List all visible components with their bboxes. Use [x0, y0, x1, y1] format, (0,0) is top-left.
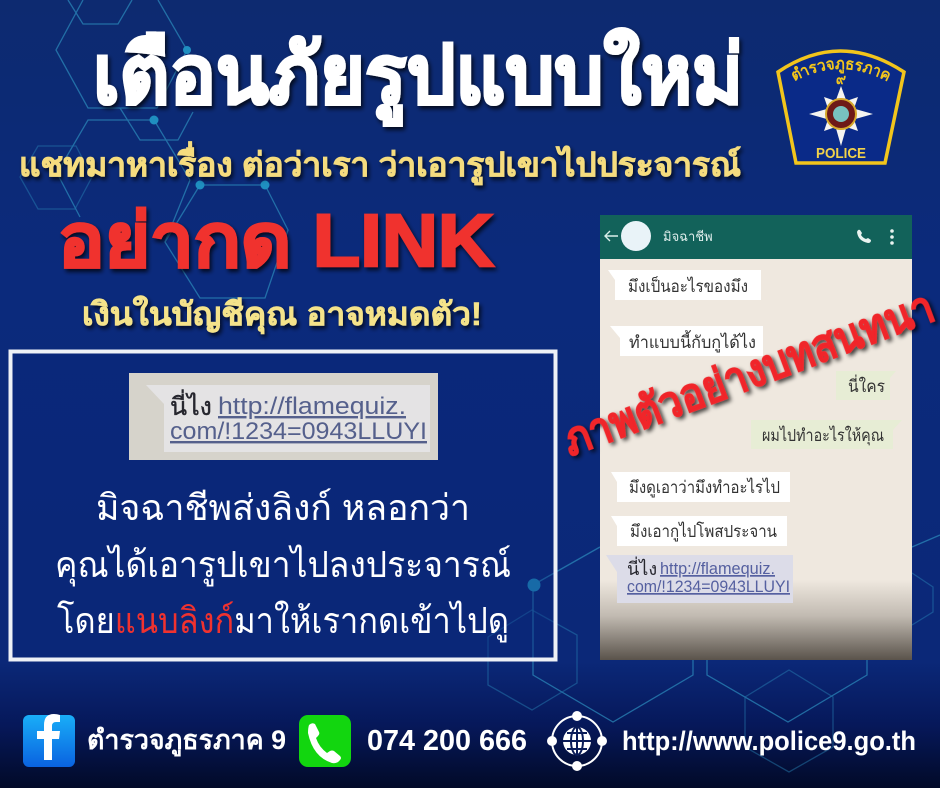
facebook page name: ตำรวจภูธรภาค 9	[87, 725, 286, 757]
chat bubbles: มึงดูเอาว่ามึงทำอะไรไป	[629, 477, 780, 498]
subtitle: แชทมาหาเรื่อง ต่อว่าเรา ว่าเอารูปเขาไปประจารณ์	[19, 141, 741, 186]
chat bubbles	[606, 270, 902, 603]
chat header: มิจฉาชีพ	[663, 229, 713, 244]
explanation text: โดยแนบลิงก์มาให้เรากดเข้าไปดู	[57, 600, 509, 643]
warning heading: อย่ากด LINK	[58, 199, 494, 282]
SMS screenshot: นี่ไง	[170, 389, 212, 421]
website: http://www.police9.go.th	[622, 726, 916, 756]
explanation text: มิจฉาชีพส่งลิงก์ หลอกว่า	[96, 487, 470, 528]
panel: explanation	[10, 352, 556, 660]
chat bubbles: นี่ไง	[627, 556, 657, 579]
police badge	[776, 49, 906, 165]
police badge: ๙	[836, 71, 846, 87]
icon: globe	[547, 711, 607, 771]
icon: facebook	[23, 714, 75, 767]
SMS screenshot	[129, 373, 438, 460]
SMS screenshot: http://flamequiz.	[218, 393, 406, 420]
chat bubbles: http://flamequiz.	[660, 559, 775, 578]
chat screenshot	[600, 215, 912, 660]
footer contacts	[23, 711, 916, 771]
SMS screenshot: com/!1234=0943LLUYI	[170, 418, 427, 445]
icon: phone	[299, 715, 351, 767]
police badge: ตำรวจภูธรภาค	[792, 60, 890, 82]
chat bubbles: ทำแบบนี้กับกูได้ไง	[629, 330, 756, 353]
explanation text: คุณได้เอารูปเขาไปลงประจารณ์	[55, 544, 511, 587]
chat bubbles: มึงเป็นอะไรของมึง	[628, 275, 748, 296]
chat bubbles: com/!1234=0943LLUYI	[627, 577, 790, 596]
chat bubbles: มึงเอากูไปโพสประจาน	[630, 521, 777, 542]
chat bubbles: นี่ใคร	[848, 374, 885, 396]
chat header	[600, 215, 912, 259]
warning subheading: เงินในบัญชีคุณ อาจหมดตัว!	[82, 295, 482, 335]
explanation text	[55, 487, 511, 643]
police badge: POLICE	[816, 145, 866, 162]
title: เตือนภัยรูปแบบใหม่	[93, 28, 743, 126]
phone number: 074 200 666	[367, 725, 527, 757]
chat bubbles: ผมไปทำอะไรให้คุณ	[762, 425, 884, 446]
